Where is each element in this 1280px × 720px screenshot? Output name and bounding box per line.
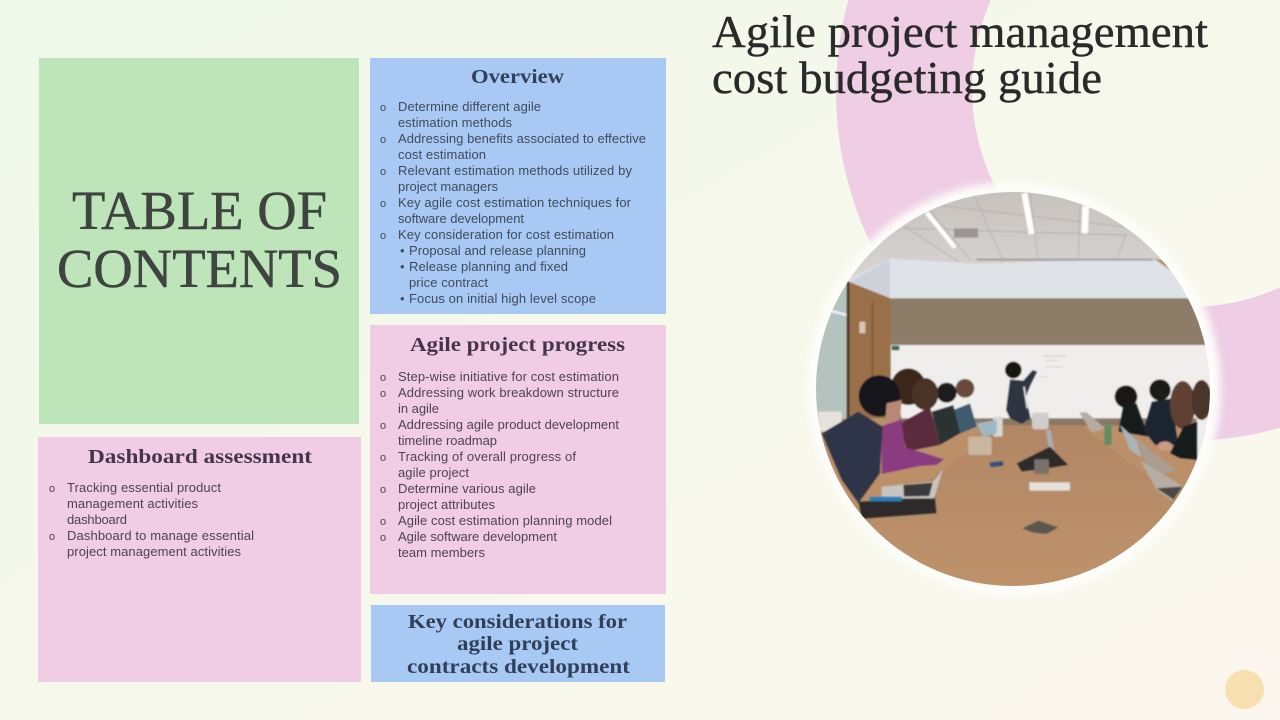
heading: dashboard assessment: Dashboard assessment xyxy=(88,446,312,468)
door xyxy=(848,282,891,418)
list: agile project progress items: o xyxy=(380,532,386,544)
heading: overview: Overview xyxy=(471,66,565,88)
heading: table of contents: CONTENTS xyxy=(57,238,342,299)
panel: key considerations xyxy=(371,605,665,682)
list: overview items xyxy=(380,99,646,306)
corner dot xyxy=(1225,670,1264,709)
list: agile project progress items: team members xyxy=(398,545,486,560)
ceiling lights xyxy=(927,213,955,248)
room shell xyxy=(818,258,1197,515)
list: overview items: Release planning and fixed xyxy=(409,259,568,274)
seated people, right side xyxy=(1115,379,1213,460)
list: overview items: Key agile cost estimation techniques for xyxy=(398,195,632,210)
list: overview items: o xyxy=(380,166,386,178)
list: overview items: Key consideration for cost estimation xyxy=(398,227,614,242)
list: dashboard items: o xyxy=(49,483,55,495)
heading: table of contents xyxy=(57,180,342,299)
list: dashboard items: Tracking essential product xyxy=(67,480,221,495)
title: cost budgeting guide xyxy=(712,52,1102,103)
photo: team meeting in a conference room xyxy=(813,190,1223,603)
list: agile project progress items: o xyxy=(380,420,386,432)
list: dashboard items: management activities xyxy=(67,496,198,511)
list: agile project progress items: o xyxy=(380,372,386,384)
list: agile project progress items: Addressing work breakdown structure xyxy=(398,385,619,400)
brown wall band xyxy=(891,298,1217,345)
photo frame: soft white ring xyxy=(807,182,1221,596)
list: overview items: cost estimation xyxy=(398,147,486,162)
whiteboard writing xyxy=(1040,356,1067,377)
right laptops xyxy=(1079,412,1183,501)
title: Agile project management xyxy=(712,6,1208,57)
list: agile project progress items: timeline roadmap xyxy=(398,433,497,448)
list: overview items: • xyxy=(400,243,405,258)
list: overview items: project managers xyxy=(398,179,498,194)
list: overview items: software development xyxy=(398,211,524,226)
heading: table of contents: TABLE OF xyxy=(72,180,327,241)
list: dashboard items xyxy=(49,480,254,559)
title xyxy=(712,6,1208,103)
list: dashboard items: Dashboard to manage essential xyxy=(67,528,254,543)
list: overview items: • xyxy=(400,291,405,306)
list: overview items: Addressing benefits associated to effective xyxy=(398,131,646,146)
list: agile project progress items: Agile software development xyxy=(398,529,557,544)
list: dashboard items: o xyxy=(49,531,55,543)
list: overview items: o xyxy=(380,230,386,242)
list: agile project progress items: in agile xyxy=(398,401,439,416)
list: agile project progress items: agile project xyxy=(398,465,469,480)
list: overview items: o xyxy=(380,102,386,114)
heading: key considerations xyxy=(407,611,630,678)
presenter xyxy=(1005,362,1037,424)
list: agile project progress items: o xyxy=(380,388,386,400)
glass wall xyxy=(813,287,847,418)
list: agile project progress items: Step-wise initiative for cost estimation xyxy=(398,369,619,384)
panel: overview xyxy=(370,58,666,314)
decorative pink ring xyxy=(836,0,1280,441)
left laptop and notebook xyxy=(858,470,943,519)
panel: agile project progress xyxy=(370,325,666,594)
list: agile project progress items: o xyxy=(380,484,386,496)
list: dashboard items: project management activities xyxy=(67,544,242,559)
list: dashboard items: dashboard xyxy=(67,512,127,527)
whiteboard xyxy=(891,345,1217,419)
list: agile project progress items xyxy=(380,369,619,560)
list: overview items: price contract xyxy=(409,275,488,290)
list: overview items: Proposal and release planning xyxy=(409,243,586,258)
list: overview items: Relevant estimation methods utilized by xyxy=(398,163,632,178)
panel: table of contents xyxy=(39,58,359,424)
list: overview items: Focus on initial high level scope xyxy=(409,291,596,306)
list: agile project progress items: o xyxy=(380,516,386,528)
heading: agile project progress: Agile project progress xyxy=(410,334,625,356)
panel: dashboard assessment xyxy=(38,437,361,682)
list: overview items: • xyxy=(400,259,405,274)
list: overview items: estimation methods xyxy=(398,115,512,130)
list: overview items: o xyxy=(380,198,386,210)
items on table xyxy=(968,413,1112,534)
heading: key considerations: contracts development xyxy=(407,656,630,678)
heading: key considerations: agile project xyxy=(457,633,578,655)
heading: key considerations: Key considerations for xyxy=(408,611,627,633)
list: overview items: o xyxy=(380,134,386,146)
table xyxy=(988,424,1112,466)
seated people, left side xyxy=(822,368,977,503)
list: agile project progress items: Agile cost estimation planning model xyxy=(398,513,612,528)
list: agile project progress items: Addressing agile product development xyxy=(398,417,619,432)
list: overview items: Determine different agile xyxy=(398,99,541,114)
list: agile project progress items: project attributes xyxy=(398,497,496,512)
list: agile project progress items: o xyxy=(380,452,386,464)
list: agile project progress items: Tracking of overall progress of xyxy=(398,449,576,464)
list: agile project progress items: Determine various agile xyxy=(398,481,536,496)
